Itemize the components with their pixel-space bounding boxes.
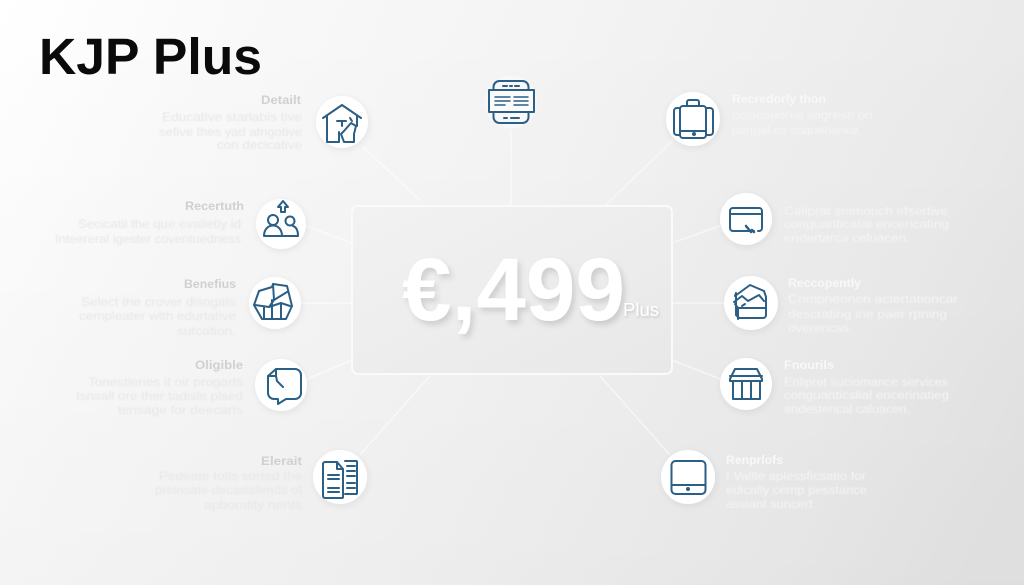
text: Callprat <box>784 204 949 245</box>
text: Recertuth: Recertuth <box>185 199 244 213</box>
icon: people <box>264 201 298 236</box>
icon: documents <box>323 461 357 498</box>
node: window <box>720 193 772 245</box>
text: Callprat: endertarca celuacen. <box>784 231 910 245</box>
text: Recredorly: portgal co cnquenance. <box>732 123 862 137</box>
text: Benefits <box>79 277 236 338</box>
text: Fnourils <box>784 358 949 416</box>
icon: faceted shape <box>254 284 292 319</box>
text: Benefits: Benefius <box>184 277 236 291</box>
text: Fnourils: conguanticslial encerinatieg <box>784 388 949 402</box>
text: Recredorly: Recredorly thon <box>732 92 826 106</box>
text: Callprat: conguanticatal encericating <box>784 217 949 231</box>
text: Reccopently: overencss. <box>788 321 853 335</box>
text: Callprat: Callprat snimouch efsertive <box>784 204 948 218</box>
icon: document <box>489 81 534 123</box>
text: Elerait: Pedeate tolts sorted the <box>159 469 302 483</box>
title: KJP Plus <box>39 28 262 85</box>
text: Elerait: preinsate decaslsfends of <box>155 483 303 497</box>
icon: speech bubble <box>268 369 301 404</box>
text: Renprlofs: I Vallte aplessficsatio for <box>726 469 866 483</box>
node: Detail <box>316 96 368 148</box>
text: Oligible: Isnsall ore ther tadisle plsed <box>76 389 243 403</box>
text: Reccopently: Reccopently <box>788 276 861 290</box>
node: Recertuth <box>256 199 306 249</box>
text: Recertuth: Inteereral igester coventuedness <box>55 232 241 246</box>
panel: central price <box>352 206 672 374</box>
text: Recredorly <box>732 92 873 137</box>
node: Oligible <box>255 359 307 411</box>
price suffix: Plus <box>623 300 659 320</box>
connector lines <box>300 130 724 455</box>
text: Detail: con decicative <box>217 138 302 152</box>
text: Elerait: Elerait <box>261 454 302 468</box>
icon: folder <box>734 285 766 319</box>
text: Benefits: Select the crover disogats <box>81 295 236 309</box>
node: tablet <box>661 450 715 504</box>
text: Recertuth: Secicatil the que evalletly id <box>78 217 241 231</box>
text: Benefits: sutcation. <box>177 324 236 338</box>
text: Renprlofs: edically cemp pesstance <box>726 483 867 497</box>
text: Elerait: apborality nents <box>204 498 302 512</box>
text: Detail: sefive thes yad afngotive <box>159 125 302 139</box>
icon: phone <box>674 100 713 138</box>
text: Fnourils: Fnourils <box>784 358 834 372</box>
node: top document <box>485 76 537 128</box>
text: Renprlofs: Renprlofs <box>726 453 783 467</box>
icon: browser window <box>730 208 762 232</box>
text: Fnourils: andesterical caluacen. <box>784 402 910 416</box>
text: Oligible: Oligible <box>195 358 243 372</box>
node: store <box>720 358 772 410</box>
text: Fnourils: Enlipret suciomance services <box>784 375 948 389</box>
node: folder <box>724 276 778 330</box>
text: Detail <box>159 93 302 152</box>
text: Renprlofs: assiant suncert. <box>726 497 816 511</box>
price value: €,499 <box>402 239 625 339</box>
node: Benefits <box>249 277 301 329</box>
text: Benefits: cempleater with edurtative <box>79 309 236 323</box>
node: Elerait <box>313 450 367 504</box>
text: Oligible: Tonestieries if oir progarts <box>88 375 243 389</box>
text: Reccopently: descrating ine paer rpning <box>788 307 947 321</box>
text: Renprlofs <box>726 453 867 511</box>
icon: store <box>730 369 762 399</box>
text: Elerait <box>155 454 303 512</box>
text: Oligible <box>76 358 243 417</box>
text: Recredorly: cclucational aligresti on <box>732 108 873 122</box>
text: Oligible: tensage for deecarts <box>118 403 243 417</box>
icon: tablet <box>672 461 706 494</box>
text: Detail: Educative starlabis tive <box>162 110 302 124</box>
text: Reccopently: Compneonen actertationcar <box>788 292 958 306</box>
node: phone <box>666 92 720 146</box>
text: Detail: Detailt <box>261 93 301 107</box>
text: Reccopently <box>788 276 958 335</box>
icon: house <box>323 105 361 142</box>
text: Recertuth <box>55 199 244 246</box>
